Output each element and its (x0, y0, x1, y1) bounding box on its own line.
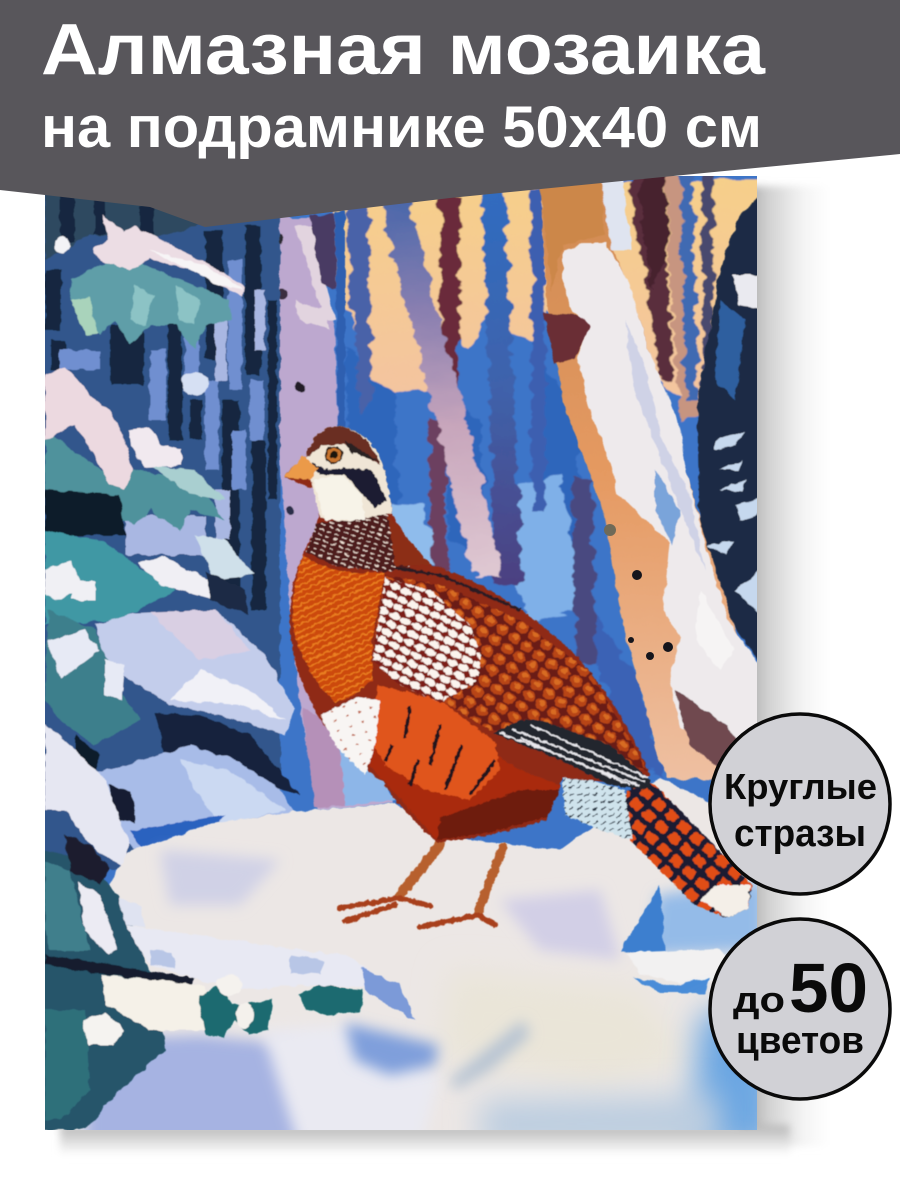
badge: round rhinestones (710, 714, 890, 894)
pink birch behind bird (272, 210, 395, 810)
bird breast (293, 555, 385, 702)
badge: round rhinestones: Круглые (724, 766, 877, 807)
bird white mottled shoulder (373, 578, 481, 703)
left large snow (45, 723, 128, 870)
lower bough (45, 530, 175, 625)
foreground birch trunk (540, 178, 765, 780)
bird head (284, 426, 392, 522)
bird striped wing feathers (493, 720, 650, 790)
bird tail (625, 778, 752, 918)
painting: pheasant in winter forest (30, 160, 775, 1150)
bird (284, 426, 752, 927)
bird rump (562, 772, 632, 840)
bird wing scales (375, 575, 648, 772)
bird neck speckle (306, 510, 410, 572)
top bough snow (92, 215, 245, 296)
right dark pine (696, 197, 757, 661)
left top dark crown (45, 195, 198, 260)
canvas drop shadow (60, 186, 830, 1155)
bird belly (368, 748, 561, 841)
bough with snow clumps (125, 925, 378, 990)
bird white flank patch (320, 697, 380, 775)
title (41, 10, 766, 160)
title: Алмазная мозаика (41, 10, 766, 90)
badge: up to 50 colours: цветов (736, 1020, 864, 1062)
header banner (0, 0, 900, 227)
dark diagonal shadow (155, 713, 300, 795)
title: на подрамнике 50х40 см (41, 95, 762, 160)
lower blue snow mound (92, 745, 295, 855)
middle bough snow (45, 367, 132, 490)
bird legs and feet (340, 845, 503, 927)
badge: round rhinestones: стразы (734, 813, 866, 855)
bird back dark edge (395, 568, 520, 610)
bird body (284, 426, 650, 842)
left pine trees with snow (30, 180, 300, 870)
badge: up to 50 colours: 50 (789, 949, 868, 1027)
middle bough needles (45, 430, 225, 530)
snow ground (40, 778, 775, 1150)
badge: up to 50 colours: до (733, 979, 785, 1020)
forest background (103, 176, 757, 886)
badge: up to 50 colours (710, 919, 890, 1099)
large lavender snow mound (95, 610, 295, 735)
lower-left snowy pine branches (40, 835, 415, 1130)
top bough needles (70, 255, 232, 350)
